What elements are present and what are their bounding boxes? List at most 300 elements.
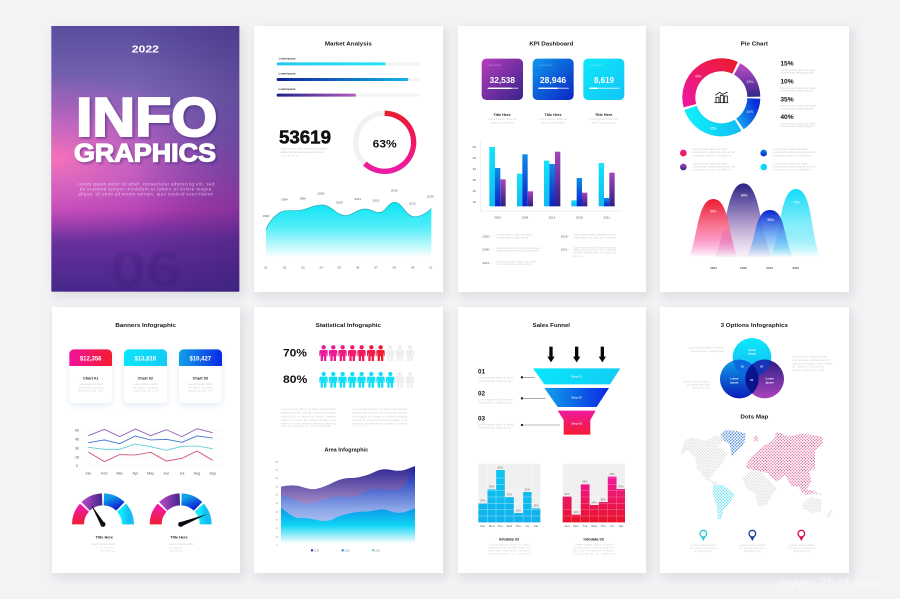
heading: dots map: Dots Map <box>740 414 769 420</box>
column chart: infodata 02: Sat <box>534 524 538 528</box>
column chart: infodata 02: Thu <box>516 524 521 528</box>
body text: nisi ut <box>353 424 370 428</box>
gauge captions: Lorem ipsum dolor <box>169 542 194 546</box>
map pins: Lorem ipsum dolor <box>789 543 814 547</box>
card captions: Lorem ipsum dolor sit <box>590 117 618 121</box>
KPI card 1: Lorem Ipsum <box>488 64 501 67</box>
banner card 1 <box>69 349 112 403</box>
panel: sales funnel <box>458 307 646 573</box>
area chart: 2011 <box>354 197 361 201</box>
line chart: Feb <box>101 472 107 476</box>
funnel: Step 02 <box>571 395 582 399</box>
bar chart <box>473 142 622 220</box>
column chart: infodata 03: consectetur adipiscing elit <box>573 546 615 550</box>
ghost number: 06 <box>110 242 182 298</box>
banner card 2: Chart 02 <box>138 377 153 381</box>
line chart: Aug <box>194 472 200 476</box>
stacked area chart: 0 <box>276 545 278 547</box>
map pins: sit amet consect <box>739 546 766 550</box>
body text <box>281 407 408 428</box>
column chart: infodata 03: sed do eiusmod tempor <box>573 548 615 552</box>
colour legend: consectetur adipiscing elit sed do <box>692 164 735 168</box>
bar chart: 2002 <box>494 216 501 220</box>
percent list: consectetur adipiscing elit <box>780 106 814 110</box>
line chart: Apr <box>132 472 139 476</box>
year notes: 2014 - <box>482 261 491 265</box>
colour legend <box>680 147 816 172</box>
area chart: 2009 <box>336 201 343 205</box>
progress bars: Lorem Ipsum <box>279 72 296 76</box>
stacked area chart: 30 <box>275 520 279 522</box>
stacked area chart: 80 <box>275 478 279 480</box>
gauge captions: consect <box>101 549 115 553</box>
colour legend: eiusmod tempor incididunt <box>773 168 811 172</box>
percent list <box>780 61 816 128</box>
stat 70% <box>283 345 414 361</box>
year notes: consectetur adipiscing <box>497 262 532 266</box>
cover year: 2022 <box>132 44 159 55</box>
map pins: adipiscing <box>695 549 712 553</box>
percent list: Lorem ipsum dolor sit amet <box>780 86 816 90</box>
venn notes: Lorem ipsum dolor sit amet <box>792 355 828 359</box>
area chart: 2016 <box>391 188 398 192</box>
percent list: Lorem ipsum dolor sit amet <box>780 104 816 108</box>
map pins <box>690 530 815 553</box>
panel: market analysis <box>254 26 443 292</box>
column chart: infodata 03: incididunt ut labore <box>573 551 615 555</box>
map pins: adipiscing <box>744 549 761 553</box>
number caption: Lorem ipsum dolor sit amet consectetur <box>281 147 327 151</box>
colour legend: Lorem ipsum dolor sit amet <box>773 147 808 151</box>
heading: KPI Dashboard <box>529 41 574 47</box>
column chart: infodata 02: Fri <box>526 524 529 528</box>
funnel steps: 02 <box>478 390 486 397</box>
mountain chart: 75% <box>793 201 800 205</box>
venn diagram: Lorem <box>730 377 739 381</box>
watermark: www.25xt.com <box>777 574 886 590</box>
stat 70%: 70% <box>283 348 307 360</box>
mountain chart: 50% <box>767 218 774 222</box>
line chart: 0 <box>76 464 78 468</box>
column chart: infodata 03 <box>563 464 625 555</box>
heading: area infographic: Area Infographic <box>324 448 368 454</box>
venn diagram: Ipsum <box>766 380 774 384</box>
venn diagram: Lorem <box>748 348 757 352</box>
year notes: Lorem ipsum dolor sit amet consec <box>573 245 617 249</box>
venn notes: sed do eiusmod tempor incid <box>792 361 833 365</box>
column chart: infodata 03: Lorem ipsum dolor sit amet <box>574 542 614 546</box>
cover title <box>74 86 217 167</box>
line chart: Jun <box>163 472 169 476</box>
bar chart: 50 <box>473 156 476 160</box>
KPI card 1: 32,538 <box>490 75 515 85</box>
body text: adipiscing elit sed do eiusmod tempor <box>281 411 336 415</box>
body text: nostrud exercitation ullamco laboris <box>281 421 337 425</box>
bar chart: 2018 <box>576 216 583 220</box>
column chart: infodata 02: 42% <box>507 493 513 497</box>
venn diagram: Lorem <box>766 377 774 381</box>
panel: KPI dashboard <box>458 26 646 292</box>
heading: 3 Options Infographics <box>721 323 788 329</box>
body text: aliqua ut enim ad minim veniam quis <box>353 418 408 422</box>
stacked area chart: 10 <box>275 536 279 538</box>
colour legend: consectetur adipiscing elit sed do <box>692 150 735 154</box>
stacked area chart: 60 <box>275 495 279 497</box>
body text: nostrud exercitation ullamco laboris <box>353 421 408 425</box>
year notes: Lorem ipsum dolor sit amet consec <box>573 233 617 237</box>
area chart: 03 <box>301 266 305 270</box>
body text: nisi ut aliquip ex ea commodo <box>281 424 331 428</box>
line chart: 45 <box>75 437 79 441</box>
card captions: amet consectetur <box>541 120 565 124</box>
column chart: infodata 03: Mon <box>573 524 579 528</box>
venn notes: magna aliqua ut enim <box>792 368 825 372</box>
mountain chart: 2012 <box>766 266 773 270</box>
map pins: sit amet consect <box>690 546 717 550</box>
column chart: infodata 03: 11% <box>573 510 579 514</box>
bar chart: 10 <box>473 200 476 204</box>
banner card 1: $12,356 <box>80 357 102 363</box>
year notes: 2006 - <box>482 248 491 252</box>
percent list: Lorem ipsum dolor sit amet <box>780 121 816 125</box>
icon: three down arrows <box>547 347 606 362</box>
area chart: 2005 <box>318 192 325 196</box>
cover title: INFO <box>76 86 217 148</box>
banner card 3: adipiscing elit <box>188 389 213 393</box>
bar chart: 20 <box>473 189 476 193</box>
body text: Lorem ipsum dolor sit amet consectetur <box>281 407 336 411</box>
KPI card 3 <box>583 59 624 100</box>
mountain chart: 1996 <box>740 266 747 270</box>
area chart: 05 <box>338 266 341 270</box>
year notes: consectetur adipiscing <box>497 235 529 239</box>
column chart: infodata 02: 56% <box>489 485 495 489</box>
progress bars: Lorem Ipsum <box>279 87 296 91</box>
funnel <box>533 368 620 435</box>
cover description <box>77 182 215 197</box>
gauge 2 <box>156 499 207 527</box>
gauge captions: sit amet <box>169 545 183 549</box>
colour legend: Lorem ipsum dolor sit amet <box>692 161 728 165</box>
panel: statistical infographic <box>254 307 443 573</box>
funnel: Step 03 <box>571 421 582 425</box>
banner card 3 <box>179 349 222 403</box>
colour legend: eiusmod tempor incididunt <box>692 153 731 157</box>
map pins: Lorem ipsum dolor <box>740 543 765 547</box>
area chart: 1984 <box>263 214 270 218</box>
column chart: infodata 02: Wed <box>506 524 513 528</box>
venn diagram: 02 <box>760 364 764 368</box>
donut chart: 35% <box>710 127 717 131</box>
percent list: 40% <box>780 114 794 121</box>
bar chart: 60 <box>473 145 476 149</box>
colour legend: Lorem ipsum dolor sit amet <box>773 161 808 165</box>
column chart: infodata 03: Wed <box>591 524 597 528</box>
line chart: Jan <box>85 472 91 476</box>
line chart: May <box>147 472 154 476</box>
heading: Market Analysis <box>325 41 372 47</box>
percent list: consectetur adipiscing elit <box>780 89 814 93</box>
year notes: tempor incididunt ut labore et <box>573 251 616 255</box>
column chart: infodata 02: sed do eiusmod tempor <box>488 548 530 552</box>
banner card 2: $13,816 <box>135 357 157 363</box>
line chart: Jul <box>180 472 185 476</box>
year notes: Lorem ipsum dolor sit amet <box>497 233 532 237</box>
line chart: Mar <box>117 472 124 476</box>
number caption <box>281 147 327 158</box>
map pins: Lorem ipsum dolor <box>691 543 716 547</box>
KPI card 3: 8,619 <box>594 75 614 85</box>
bar chart: 2014 <box>549 216 556 220</box>
colour legend: eiusmod tempor incididunt <box>773 153 811 157</box>
gauge 1 <box>78 499 128 527</box>
percent list: consectetur adipiscing elit <box>780 124 814 128</box>
area chart: 08 <box>393 266 396 270</box>
year notes: 2002 - <box>482 234 491 238</box>
funnel steps: consectetur adipiscing <box>478 379 511 383</box>
cover description: Lorem ipsum dolor sit amet, consectetur adipiscing elit, sed <box>77 182 215 187</box>
percent list: 10% <box>780 78 794 85</box>
big number: 53619 <box>279 127 331 148</box>
funnel steps: Lorem ipsum dolor sit amet <box>478 422 514 426</box>
line chart: 60 <box>75 428 79 432</box>
year notes <box>482 233 617 266</box>
funnel steps: 01 <box>478 369 486 376</box>
column chart: infodata 03: 57% <box>618 484 624 488</box>
venn notes: adipiscing <box>692 386 710 390</box>
venn diagram: 01 <box>741 364 744 368</box>
line chart: 15 <box>75 455 79 459</box>
gauge captions: Title Here <box>96 536 113 540</box>
venn diagram: Ipsum <box>748 352 757 356</box>
area chart: 1996 <box>299 197 306 201</box>
cover description: aliqua. Ut enim ad minim veniam, quis nostrud exercitation <box>78 192 214 197</box>
panel: pie chart <box>660 26 849 292</box>
year notes: adipiscing elit sed do eiusmod <box>573 235 616 239</box>
card captions: Title Here <box>544 113 562 117</box>
venn notes: ut labore et dolore <box>792 365 824 369</box>
area chart: 02 <box>283 266 287 270</box>
column chart: infodata 03: Tue <box>583 524 588 528</box>
banner card 1: adipiscing elit <box>78 389 104 393</box>
banner card 3: Lorem ipsum dolor <box>188 382 212 386</box>
banner card 1: sit amet consect <box>78 385 104 389</box>
year notes: 2021 - <box>561 248 569 252</box>
column chart: infodata 02: consectetur adipiscing elit <box>488 546 531 550</box>
KPI card 1 <box>482 59 523 100</box>
banner card 1: Chart 01 <box>83 377 99 381</box>
dotted world map <box>680 430 832 520</box>
stacked area chart: 90 <box>275 470 279 472</box>
column chart: infodata 03: Thu <box>601 524 606 528</box>
area chart: 2020 <box>427 194 434 198</box>
card captions: Title Here <box>493 113 511 117</box>
gauge captions: consect <box>169 549 183 553</box>
gauge captions <box>91 536 194 553</box>
card captions: Lorem ipsum dolor sit <box>539 117 567 121</box>
area chart: 2012 <box>409 202 416 206</box>
body text: adipiscing elit sed do eiusmod tempor <box>353 411 407 415</box>
column chart: infodata 03: Sun <box>564 524 570 528</box>
heading: Pie Chart <box>741 41 768 47</box>
area chart: 1984 <box>281 198 288 202</box>
venn notes: consectetur adipiscing <box>691 349 724 353</box>
line chart: Sep <box>209 472 216 476</box>
body text: incididunt ut labore et dolore magna <box>353 414 408 418</box>
area chart <box>263 188 434 270</box>
funnel steps <box>478 369 560 430</box>
progress bars <box>277 57 420 97</box>
stacked area chart <box>275 461 415 552</box>
funnel steps: 03 <box>478 415 486 422</box>
mountain chart: 1984 <box>710 266 717 270</box>
column chart: infodata 02: 34% <box>480 499 486 503</box>
year notes: adipiscing elit sed do eiusmod <box>573 248 616 252</box>
panel: 3 options and dots map <box>660 307 849 573</box>
stacked area chart: 2019 <box>314 550 320 552</box>
bar chart: 30 <box>473 178 476 182</box>
funnel steps: Lorem ipsum dolor sit amet <box>478 376 514 380</box>
stat 80% <box>283 372 414 388</box>
colour legend: eiusmod tempor incididunt <box>692 168 731 172</box>
year notes: 2018 - <box>561 234 569 238</box>
heading: Sales Funnel <box>533 323 570 329</box>
donut chart <box>689 65 754 131</box>
column chart: infodata 03: 44% <box>564 492 570 496</box>
KPI card 2: 28,946 <box>540 75 567 85</box>
map pins: sit amet consect <box>788 546 815 550</box>
panel: banners infographic <box>52 307 240 573</box>
banner card 3: sit amet consect <box>188 385 213 389</box>
venn notes: consectetur adipiscing elit <box>792 358 829 362</box>
card captions <box>488 113 618 124</box>
venn diagram: Ipsum <box>730 380 739 384</box>
gauge captions: Title Here <box>170 536 188 540</box>
donut chart: 40% <box>695 74 702 78</box>
percent list: consectetur adipiscing elit <box>780 71 814 75</box>
venn diagram <box>720 338 784 398</box>
banner card 2: Lorem ipsum dolor <box>133 382 157 386</box>
area chart: 10 <box>429 266 433 270</box>
card captions: Title Here <box>595 113 612 117</box>
funnel steps: Lorem ipsum dolor sit amet <box>478 397 514 401</box>
icon: rising bar chart <box>714 92 728 103</box>
banner card 3: Chart 03 <box>193 377 208 381</box>
venn notes <box>683 346 833 390</box>
venn notes: Lorem ipsum dolor <box>683 380 710 384</box>
column chart: infodata 02: 85% <box>498 465 504 469</box>
card captions: Lorem ipsum dolor sit <box>488 117 517 121</box>
area chart: 09 <box>411 266 415 270</box>
year notes: dolore <box>573 254 584 258</box>
year notes: Lorem ipsum dolor sit amet consec <box>497 246 541 250</box>
cover description: do eiusmod tempor incididunt ut labore et dolore magna <box>80 187 212 192</box>
line chart: 30 <box>75 446 79 450</box>
column chart: infodata 02: 15% <box>516 508 522 512</box>
mountain chart: 2023 <box>792 266 799 270</box>
progress bars: Lorem Ipsum <box>279 57 296 61</box>
stacked area chart: 2021 <box>375 550 381 552</box>
column chart: infodata 02: Lorem ipsum dolor sit amet <box>490 542 529 546</box>
gauge captions: sit amet <box>97 545 114 549</box>
banner card 1: Lorem ipsum dolor <box>79 382 103 386</box>
banner card 2: adipiscing elit <box>133 389 158 393</box>
body text: Lorem ipsum dolor sit amet consectetur <box>353 407 407 411</box>
column chart: infodata 02 <box>478 464 540 555</box>
bar chart: 40 <box>473 167 476 171</box>
column chart: infodata 02: 51% <box>525 487 531 491</box>
stacked area chart: 70 <box>275 486 279 488</box>
bar chart: 2006 <box>522 216 529 220</box>
column chart: infodata 03: 30% <box>600 497 606 501</box>
stacked area chart: 50 <box>275 503 279 505</box>
column chart: infodata 02: Mon <box>489 524 495 528</box>
heading: Statistical Infographic <box>316 323 381 329</box>
donut 63%: 63% <box>373 138 397 150</box>
KPI card 3: Lorem Ipsum <box>589 64 603 67</box>
colour legend: Lorem ipsum dolor sit amet <box>692 147 728 151</box>
column chart: infodata 02: 23% <box>533 504 539 508</box>
funnel steps: consectetur adipiscing <box>478 426 511 430</box>
bar chart: 2021 <box>603 216 610 220</box>
banner card 2 <box>124 349 167 403</box>
funnel: Step 01 <box>571 374 582 378</box>
funnel steps: consectetur adipiscing <box>478 401 511 405</box>
column chart: infodata 03: Infodata 03 <box>584 537 604 541</box>
card captions: amet consectetur <box>490 120 514 124</box>
donut chart: 10% <box>747 110 753 114</box>
venn diagram: 03 <box>750 378 754 382</box>
stacked area chart: 20 <box>275 528 279 530</box>
banner card 2: sit amet consect <box>133 385 158 389</box>
year notes: Lorem ipsum dolor sit amet <box>497 259 536 263</box>
panel: cover <box>51 26 239 298</box>
donut 63% <box>356 113 414 171</box>
column chart: infodata 03: 78% <box>609 472 615 476</box>
cover title: GRAPHICS <box>74 139 216 167</box>
column chart: infodata 02: incididunt ut labore <box>488 551 531 555</box>
donut chart: 15% <box>747 80 753 84</box>
mountain chart: 80% <box>741 194 748 198</box>
column chart: infodata 03: 25% <box>591 500 597 504</box>
column chart: infodata 02: Infodata 02 <box>499 537 519 541</box>
mountain chart: 55% <box>710 210 717 214</box>
banner card 3: $10,427 <box>190 357 212 363</box>
stat 80%: 80% <box>283 374 308 386</box>
percent list: 35% <box>780 96 794 103</box>
percent list: 15% <box>780 61 794 68</box>
number caption: adipiscing elit sed do eiusmod tempor <box>281 150 324 154</box>
KPI card 2 <box>533 59 574 100</box>
body text: incididunt ut labore et dolore magna <box>281 414 336 418</box>
area chart: 01 <box>264 266 268 270</box>
area chart: 06 <box>356 266 360 270</box>
stacked area chart: 40 <box>275 511 279 513</box>
area chart: 04 <box>320 266 323 270</box>
colour legend: consectetur adipiscing elit sed do <box>773 150 816 154</box>
mountain chart <box>688 183 821 270</box>
year notes: adipiscing elit sed do eiusmod <box>497 249 539 253</box>
KPI card 2: Lorem Ipsum <box>539 64 552 67</box>
stacked area chart: 100 <box>275 461 279 463</box>
area chart: 07 <box>374 266 378 270</box>
line chart <box>75 428 224 476</box>
number caption: incididunt <box>281 154 299 158</box>
heading: Banners Infographic <box>115 323 176 329</box>
venn notes: Lorem ipsum dolor sit amet <box>688 346 724 350</box>
map pins: adipiscing <box>793 549 810 553</box>
venn notes: sit amet consect <box>687 383 710 387</box>
